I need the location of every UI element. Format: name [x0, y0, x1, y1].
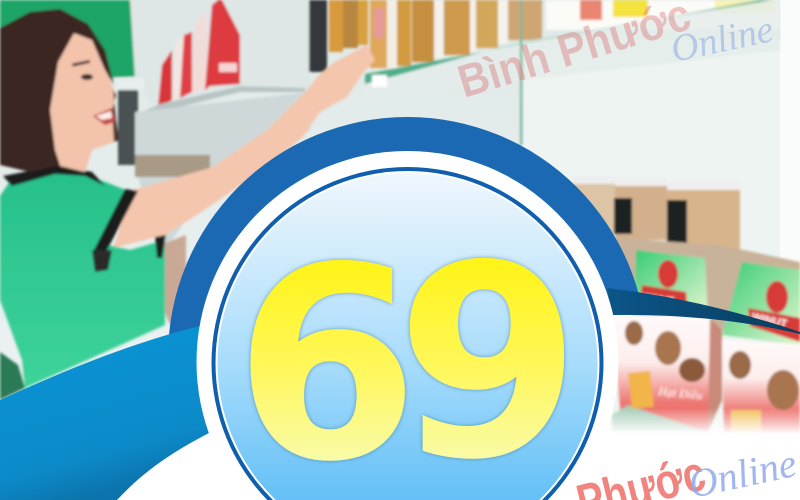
upper background wall [130, 0, 310, 105]
eye [81, 74, 93, 80]
white inner ring [216, 171, 600, 500]
watermark: Online top: Online [667, 8, 777, 71]
green red product boxes: WINUT [641, 292, 675, 308]
inner gradient disc [218, 173, 598, 500]
dark green shadow bottom left [0, 352, 25, 400]
top glass shelf edge [365, 0, 773, 84]
green red product boxes: WINUT [750, 311, 788, 330]
white ring [196, 151, 618, 434]
green red product boxes: Hạt Điều [657, 384, 703, 403]
woman's arm [113, 45, 375, 248]
jars lower right [572, 176, 740, 252]
blue outer circle [169, 117, 638, 334]
fade to white under products [606, 410, 800, 433]
swoosh: dark teal right [607, 288, 800, 334]
face and neck [50, 33, 116, 172]
black sleeve cuff [94, 189, 138, 250]
swoosh: blue left [0, 326, 215, 500]
lips [93, 108, 115, 125]
lower glass shelf [135, 92, 310, 250]
dark blue thin ring [212, 167, 604, 500]
white lower left ground [117, 433, 600, 500]
top shelf nut jars [309, 0, 780, 72]
dark shelf pillar [118, 90, 138, 165]
red product boxes [136, 0, 305, 115]
green store wall [0, 0, 146, 80]
green red product boxes [612, 238, 800, 435]
woman's shirt [0, 170, 165, 388]
price tag [372, 75, 387, 87]
hair [0, 9, 114, 172]
black collar [3, 165, 105, 186]
